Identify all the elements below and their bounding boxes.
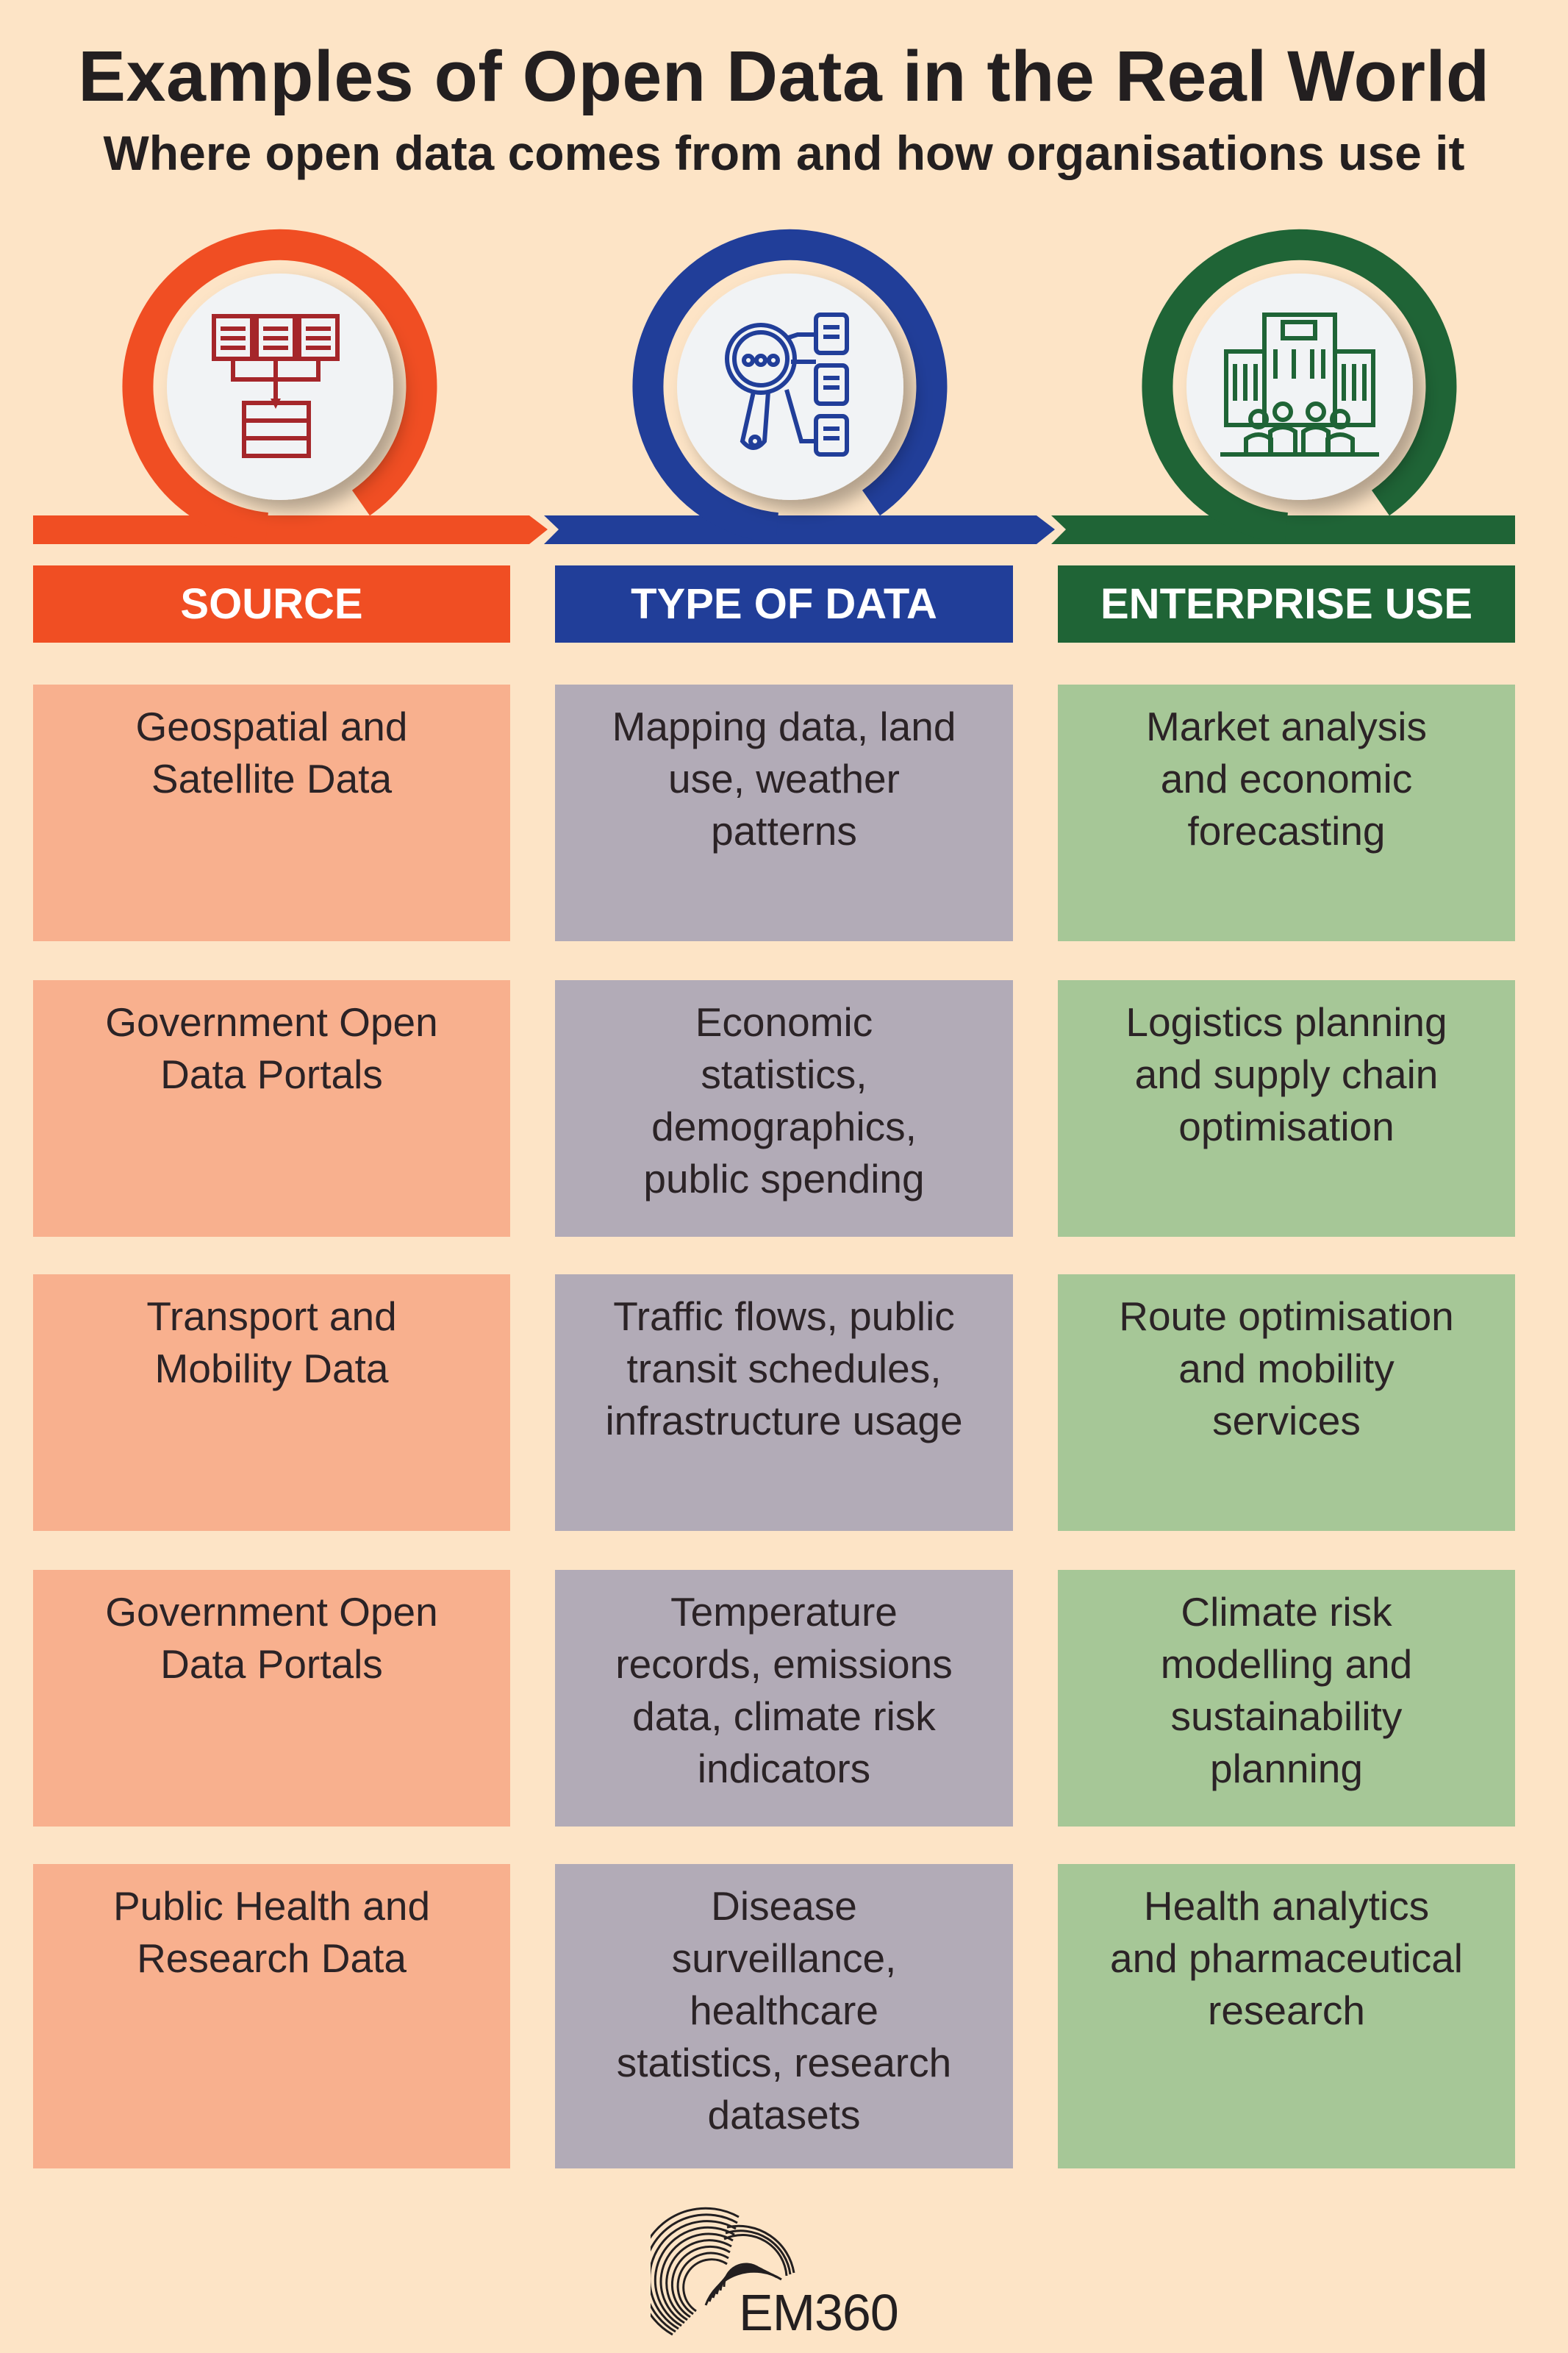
row 3: source: Mobility Data (155, 1346, 388, 1391)
icon circle: type of data (677, 274, 903, 500)
header: enterprise use (1058, 565, 1515, 643)
logo: EM360 (651, 2207, 898, 2341)
header: source: SOURCE (180, 580, 363, 628)
row 4: type: records, emissions (615, 1641, 953, 1687)
row 3: type: Traffic flows, public (613, 1293, 955, 1339)
row 3: use: Route optimisation (1119, 1293, 1454, 1339)
row 4: source: Government Open (105, 1589, 438, 1635)
row 3: type (555, 1274, 1013, 1531)
row 3: source (33, 1274, 510, 1531)
row 3: source: Transport and (146, 1293, 397, 1339)
title: Examples of Open Data in the Real World (78, 36, 1490, 116)
row 3: use: and mobility (1178, 1346, 1395, 1391)
row 5: type: surveillance, (672, 1935, 896, 1981)
row 1: source (33, 685, 510, 941)
row 2: source (33, 980, 510, 1237)
header: type of data: TYPE OF DATA (631, 580, 937, 628)
row 1: type: use, weather (668, 756, 900, 801)
row 5: use: research (1208, 1988, 1365, 2033)
row 1: use: Market analysis (1146, 704, 1427, 749)
ring: green (1157, 245, 1441, 528)
ring: orange (137, 245, 421, 528)
row 1: source: Satellite Data (151, 756, 392, 801)
row 5: type: healthcare (690, 1988, 878, 2033)
row 4: source (33, 1570, 510, 1827)
row 3: use (1058, 1274, 1515, 1531)
row 3: type: transit schedules, (626, 1346, 941, 1391)
row 2: use: optimisation (1178, 1104, 1395, 1149)
row 3: type: infrastructure usage (605, 1398, 963, 1443)
header: type of data (555, 565, 1013, 643)
row 4: type (555, 1570, 1013, 1827)
row 1: type (555, 685, 1013, 941)
row 2: source: Data Portals (160, 1051, 383, 1097)
logo text: EM360 (739, 2284, 898, 2341)
row 2: type: statistics, (701, 1051, 867, 1097)
row 2: use: Logistics planning (1125, 999, 1447, 1045)
row 1: use (1058, 685, 1515, 941)
row 5: use: Health analytics (1144, 1883, 1429, 1929)
icon circle: enterprise use (1186, 274, 1413, 500)
row 5: source (33, 1864, 510, 2168)
row 4: use: planning (1210, 1746, 1363, 1791)
row 5: source: Research Data (137, 1935, 407, 1981)
header: source (33, 565, 510, 643)
row 4: use: sustainability (1171, 1693, 1402, 1739)
row 4: use: modelling and (1161, 1641, 1412, 1687)
row 2: type (555, 980, 1013, 1237)
row 3: use: services (1212, 1398, 1361, 1443)
row 5: use: and pharmaceutical (1110, 1935, 1463, 1981)
row 5: source: Public Health and (113, 1883, 430, 1929)
row 1: type: Mapping data, land (612, 704, 956, 749)
row 5: type: Disease (711, 1883, 857, 1929)
row 2: source: Government Open (105, 999, 438, 1045)
row 5: type: statistics, research (617, 2040, 951, 2085)
header: enterprise use: ENTERPRISE USE (1100, 580, 1472, 628)
row 5: use (1058, 1864, 1515, 2168)
ribbon: green (1051, 515, 1515, 544)
row 1: use: forecasting (1187, 808, 1386, 854)
row 4: source: Data Portals (160, 1641, 383, 1687)
row 2: type: public spending (643, 1156, 925, 1202)
graphic: rings, ribbons and icons (33, 229, 1515, 544)
ribbon: blue (544, 515, 1055, 544)
row 2: use (1058, 980, 1515, 1237)
row 5: type (555, 1864, 1013, 2168)
row 1: use: and economic (1161, 756, 1412, 801)
row 4: type: indicators (698, 1746, 870, 1791)
row 1: source: Geospatial and (135, 704, 407, 749)
row 1: type: patterns (711, 808, 857, 854)
row 4: type: Temperature (670, 1589, 898, 1635)
row 5: type: datasets (708, 2092, 860, 2138)
subtitle: Where open data comes from and how organisations use it (104, 126, 1464, 180)
row 2: type: Economic (695, 999, 873, 1045)
icon circle: source (167, 274, 393, 500)
ribbon: orange (33, 515, 548, 544)
row 4: type: data, climate risk (632, 1693, 936, 1739)
row 2: use: and supply chain (1135, 1051, 1438, 1097)
row 2: type: demographics, (651, 1104, 917, 1149)
ring: blue (648, 245, 931, 528)
row 4: use (1058, 1570, 1515, 1827)
row 4: use: Climate risk (1181, 1589, 1392, 1635)
